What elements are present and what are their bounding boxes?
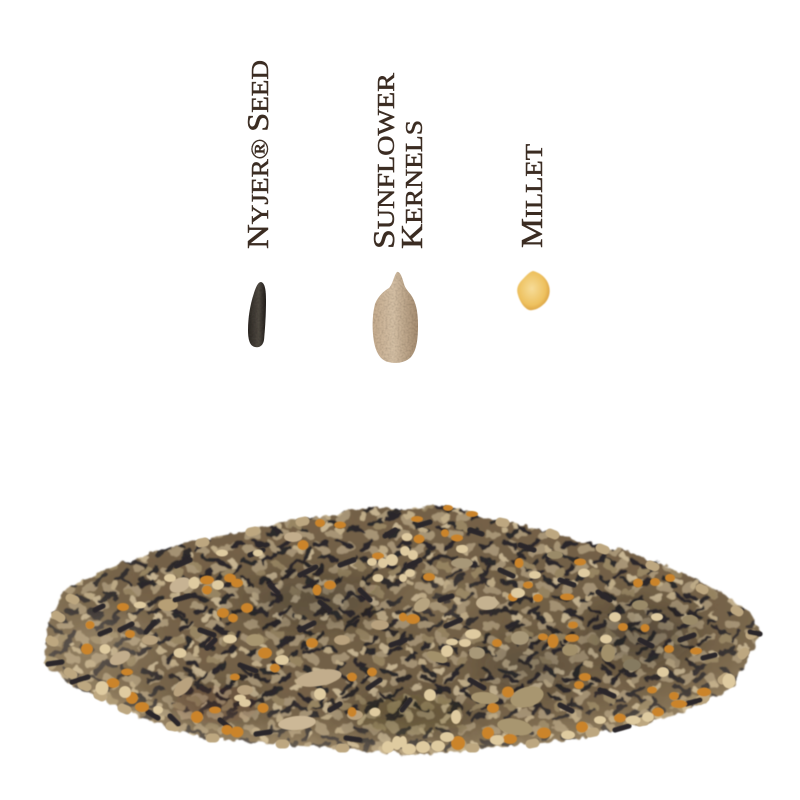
pile: cream millet [96,533,736,754]
pile: dark nyjer seeds [48,522,760,740]
pile: rim grains [50,521,753,748]
seed pile [30,495,770,765]
pile: seed texture [30,495,770,765]
label: Millet: MILLET [514,144,549,248]
label: Sunflower Kernels [366,72,429,249]
label: Sunflower Kernels: SUNFLOWER [366,72,401,249]
label: Nyjer Seed: NYJER® SEED [240,60,275,249]
icon: millet seed [517,271,550,310]
pile: large kernels [107,532,698,738]
icon: nyjer seed [248,282,266,347]
icon: sunflower kernel [373,272,418,363]
pile: orange millet [81,505,711,750]
pile: broad dark and light areas [65,578,695,735]
label: Sunflower Kernels: KERNELS [394,120,429,249]
